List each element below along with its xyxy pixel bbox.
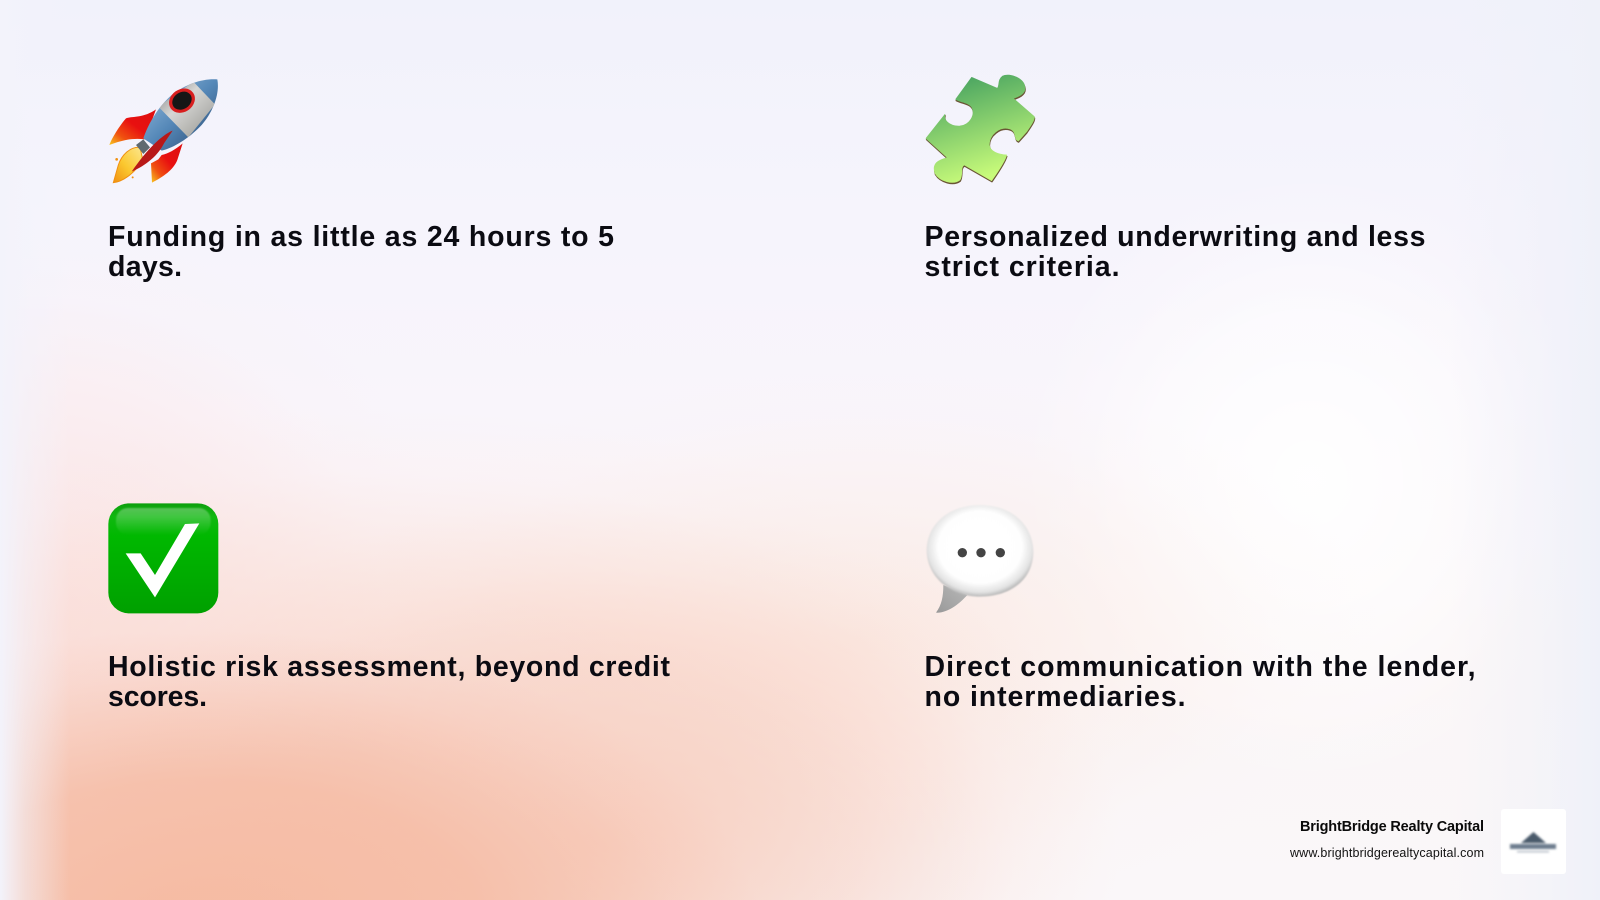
footer: company name and website bbox=[1289, 819, 1484, 860]
text: underwriting bbox=[924, 221, 1426, 283]
footer: company name and website: BrightBridge Realty Capital bbox=[1300, 819, 1484, 835]
text: communication bbox=[924, 651, 1476, 713]
text: risk assessment: Holistic risk assessment, beyond credit bbox=[108, 651, 670, 683]
icon: rocket bbox=[109, 73, 223, 183]
icon: speech bubble bbox=[927, 505, 1033, 613]
text: risk assessment bbox=[108, 651, 670, 713]
text: funding speed: Funding in as little as 24 hours to 5 bbox=[108, 221, 614, 253]
text: funding speed bbox=[108, 221, 614, 283]
text: funding speed: days. bbox=[108, 251, 182, 283]
text: risk assessment: scores. bbox=[108, 681, 207, 713]
logo bbox=[1501, 809, 1566, 874]
text: underwriting: strict criteria. bbox=[924, 251, 1120, 283]
text: communication: no intermediaries. bbox=[924, 681, 1186, 713]
icon: puzzle piece bbox=[926, 75, 1035, 184]
text: underwriting: Personalized underwriting and less bbox=[924, 221, 1426, 253]
icon: check mark bbox=[108, 503, 218, 613]
text: communication: Direct communication with the lender, bbox=[924, 651, 1476, 683]
footer: company name and website: www.brightbridgerealtycapital.com bbox=[1289, 846, 1484, 860]
